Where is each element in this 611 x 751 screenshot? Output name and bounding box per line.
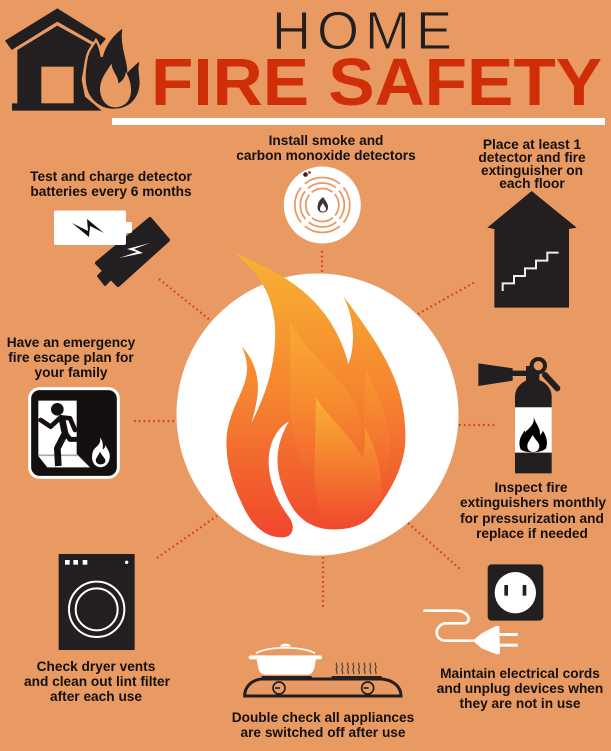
icon: central flame (226, 253, 405, 537)
text: test batteries: batteries every 6 months (30, 184, 192, 199)
text: electrical cords: and unplug devices when (437, 681, 603, 696)
title: FIRE SAFETY (151, 45, 602, 120)
text: dryer vents: and clean out lint filter (24, 674, 171, 689)
title underline (112, 118, 605, 125)
steam (336, 663, 376, 674)
icon: stove with pot (245, 644, 401, 696)
text: dryer vents: after each use (50, 689, 142, 704)
text: inspect extinguishers: extinguishers monthly (460, 495, 606, 510)
text: escape plan: your family (34, 365, 108, 380)
text: inspect extinguishers: replace if needed (476, 526, 588, 541)
title: HOME (272, 1, 452, 61)
text: appliances: are switched off after use (240, 725, 406, 740)
pot (251, 644, 320, 675)
text: place detector each floor: Place at least 1 (483, 137, 581, 152)
text: place detector each floor: detector and fire (478, 150, 586, 165)
text: place detector each floor: each floor (499, 176, 565, 191)
icon: fire extinguisher (478, 359, 557, 473)
icon: house on fire (5, 8, 142, 111)
text: electrical cords: Maintain electrical cords (440, 666, 600, 681)
text: appliances: Double check all appliances (232, 710, 415, 725)
icon: outlet and plug (423, 564, 543, 654)
title (151, 1, 602, 120)
text: install detectors: Install smoke and (269, 133, 383, 148)
black battery (97, 219, 168, 285)
text: test batteries: Test and charge detector (30, 169, 193, 184)
icon: emergency exit sign (30, 389, 118, 477)
text: escape plan: fire escape plan for (8, 350, 134, 365)
icon: house with stairs (487, 191, 577, 308)
white battery (54, 210, 132, 245)
icon: dryer (59, 554, 135, 650)
text: inspect extinguishers: Inspect fire (494, 480, 568, 495)
text: escape plan: Have an emergency (7, 335, 136, 350)
text: install detectors: carbon monoxide detectors (236, 148, 416, 163)
text: dryer vents: Check dryer vents (37, 659, 156, 674)
text: place detector each floor: extinguisher on (481, 163, 583, 178)
central white circle (176, 274, 458, 556)
dotted connectors (134, 251, 497, 607)
icon: batteries (54, 210, 168, 285)
text: electrical cords: they are not in use (460, 696, 581, 711)
text: inspect extinguishers: for pressurization and (460, 511, 604, 526)
icon: smoke detector (284, 166, 361, 244)
